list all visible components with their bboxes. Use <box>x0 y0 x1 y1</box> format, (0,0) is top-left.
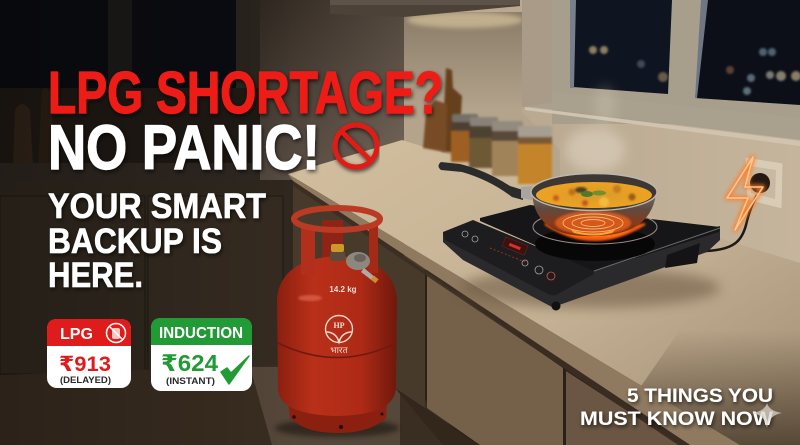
icon: no cylinder <box>106 324 126 342</box>
subtitle: HERE. <box>48 256 143 295</box>
background: lit back wall <box>330 0 800 270</box>
pan rim <box>531 174 657 210</box>
cooktop base <box>443 226 720 307</box>
cutting boards <box>423 68 462 152</box>
HP logo: HP <box>333 321 345 330</box>
floor <box>0 365 470 445</box>
valve <box>330 244 345 261</box>
icon: sparkle <box>752 403 782 428</box>
HP logo <box>326 316 352 357</box>
badge: induction price: ₹624 <box>161 350 218 376</box>
callout: 5 things <box>580 386 773 430</box>
weight label: 14.2 kg <box>329 285 357 294</box>
subtitle: BACKUP IS <box>48 222 222 261</box>
window pane left <box>573 0 672 94</box>
badge: LPG price: LPG <box>60 326 93 343</box>
title line 2: NO PANIC! <box>48 113 320 183</box>
counter top <box>288 140 800 445</box>
wall socket with plug <box>745 157 783 209</box>
window with night view <box>525 0 800 146</box>
cylinder body <box>277 256 397 416</box>
title line 1: LPG SHORTAGE? <box>48 60 443 126</box>
cooling vent <box>665 243 700 268</box>
base cabinets <box>293 181 690 445</box>
power cord <box>705 195 757 251</box>
icon: prohibition sign <box>335 125 377 167</box>
frying pan <box>438 162 657 236</box>
icon: electric bolt <box>727 157 763 230</box>
window pane right <box>695 0 800 105</box>
cylinder ring handle <box>294 208 380 230</box>
cooktop glass surface <box>480 205 720 271</box>
curry <box>536 182 652 208</box>
cylinder handle posts <box>301 226 315 275</box>
pan bowl <box>532 194 656 236</box>
regulator <box>346 252 379 283</box>
callout: 5 things: 5 THINGS YOU <box>627 386 773 407</box>
glowing burner <box>533 210 657 244</box>
callout: 5 things: MUST KNOW NOW <box>580 409 773 430</box>
steam <box>565 85 625 172</box>
cylinder rear post <box>322 220 343 258</box>
badge: induction price: INDUCTION <box>159 325 243 342</box>
LPG gas cylinder <box>275 208 399 437</box>
icon: check mark <box>221 356 249 384</box>
badge: LPG price: ₹913 <box>59 353 111 376</box>
badge: LPG price <box>47 319 131 388</box>
burner reflection <box>535 227 655 261</box>
badge: induction price: (INSTANT) <box>166 376 215 386</box>
spice jars <box>451 114 552 184</box>
badge: induction price <box>151 318 252 391</box>
induction cooktop <box>438 162 720 310</box>
cylinder foot <box>288 402 387 433</box>
pan handle <box>438 162 523 200</box>
badge: LPG price: (DELAYED) <box>60 375 111 385</box>
subtitle: YOUR SMART <box>48 187 266 226</box>
cooktop control panel <box>443 220 594 295</box>
subtitle <box>48 187 266 295</box>
HP logo: भारत <box>330 345 349 357</box>
